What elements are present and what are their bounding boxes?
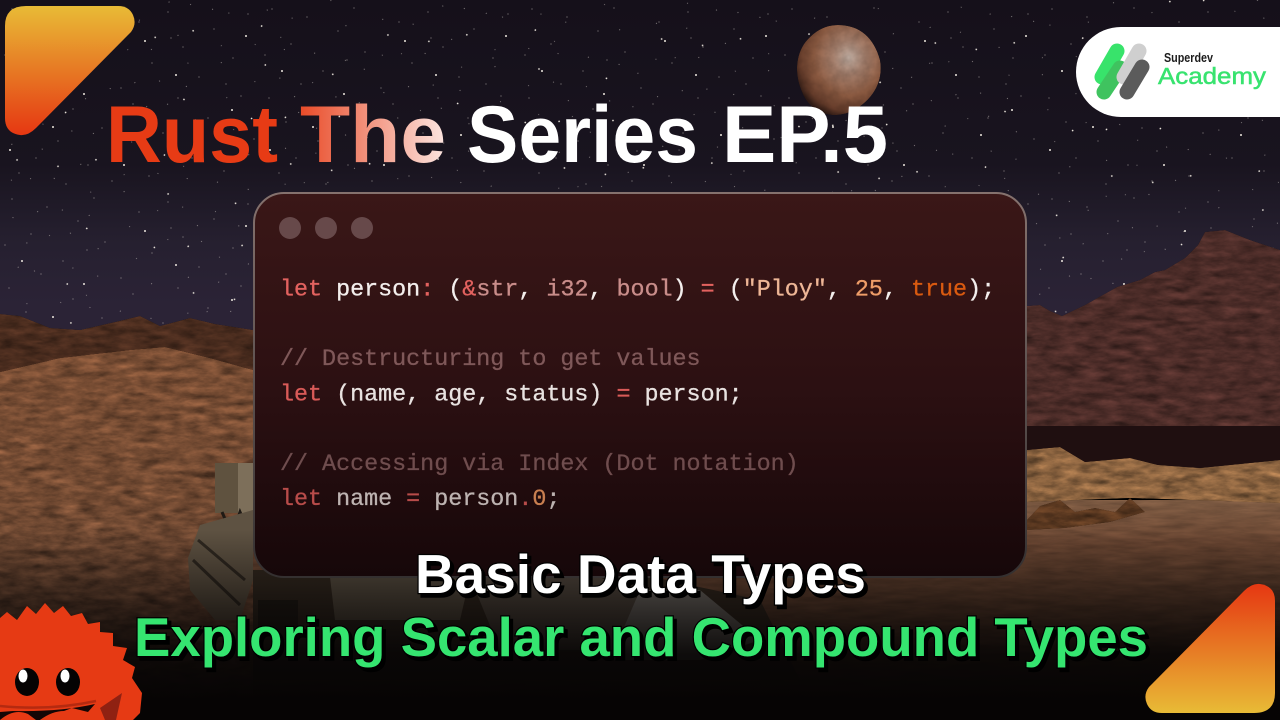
code: index access statement: let name = person.0; <box>280 487 560 513</box>
code comment: destructuring: // Destructuring to get values <box>280 347 701 373</box>
title: Series <box>467 90 698 180</box>
code comment: index access: // Accessing via Index (Dot notation) <box>280 452 799 478</box>
decoration: top-left gradient triangle <box>5 6 135 135</box>
landscape: dark lake band <box>1027 426 1280 470</box>
rover <box>188 463 800 680</box>
subtitle: basic data types: Basic Data Types <box>415 543 866 605</box>
icon: Ferris the crab <box>0 603 142 720</box>
landscape: right mountain <box>1027 230 1280 440</box>
title <box>106 90 888 180</box>
logo mark <box>1102 51 1142 92</box>
crab arm shadow <box>100 693 122 720</box>
code: destructuring statement: let (name, age, status) = person; <box>280 382 743 408</box>
left eye <box>15 668 39 696</box>
window frame <box>254 193 1026 577</box>
right eye <box>56 668 80 696</box>
crab claw <box>0 711 72 720</box>
logo text: Superdev: Superdev <box>1164 51 1213 65</box>
panel: code window <box>254 193 1026 577</box>
logo text: Academy: Academy <box>1158 63 1267 89</box>
title: The <box>300 90 446 180</box>
code: tuple declaration: let person: (&str, i32, bool) = ("Ploy", 25, true); <box>280 278 995 304</box>
logo: Superdev Academy <box>1076 27 1280 117</box>
landscape: distant left ridge <box>0 314 253 400</box>
crab body <box>0 603 142 720</box>
crab mouth <box>0 704 95 720</box>
logo pill <box>1076 27 1280 117</box>
decoration: bottom-right gradient triangle <box>1145 584 1275 713</box>
title: EP.5 <box>722 90 888 180</box>
moon <box>797 25 881 115</box>
bottom fade to black <box>0 530 1280 702</box>
subtitle: exploring scalar and compound types: Exploring Scalar and Compound Types <box>134 606 1148 668</box>
background: night sky <box>0 0 1280 470</box>
crab mouth line <box>0 701 96 708</box>
landscape: left hill and ground <box>0 347 253 720</box>
landscape: foreground sand <box>253 500 1280 720</box>
landscape: right rocks <box>1027 447 1280 530</box>
title: Rust <box>106 90 278 180</box>
window control dots <box>279 217 373 239</box>
